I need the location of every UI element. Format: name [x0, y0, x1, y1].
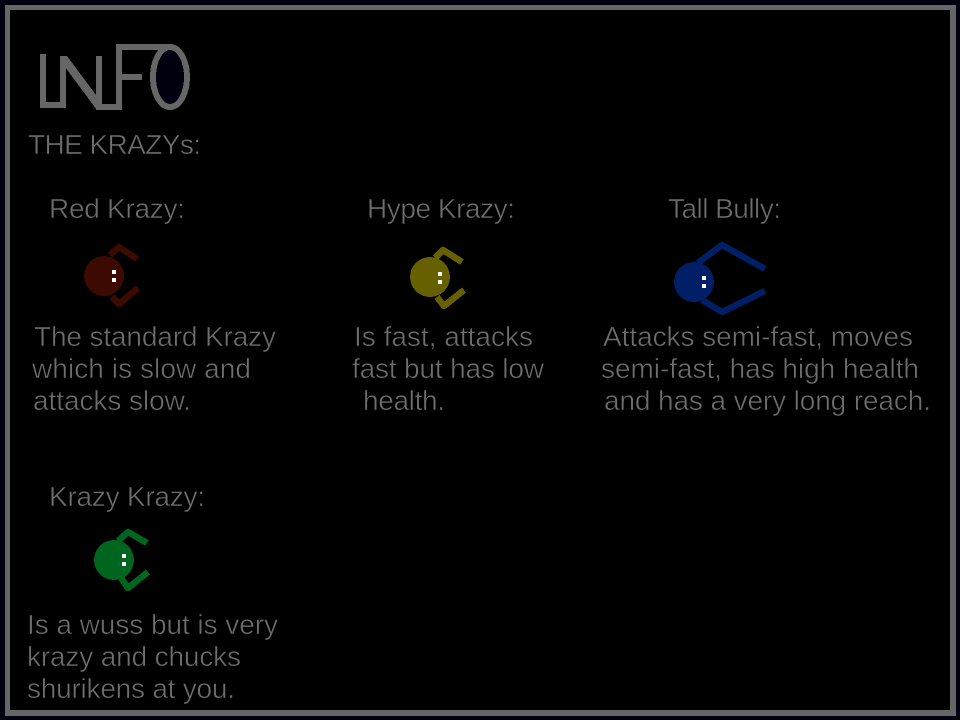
panel: Red Krazy: [31, 193, 276, 416]
panel: Krazy Krazy: [27, 481, 278, 704]
icon: hype krazy: [410, 250, 464, 306]
description: Hype Krazy: health.: [363, 385, 445, 416]
label: Krazy Krazy: Krazy Krazy:: [49, 481, 205, 512]
description: Red Krazy: attacks slow.: [33, 385, 191, 416]
panel: Tall Bully: [601, 193, 931, 416]
description: Tall Bully: Attacks semi-fast, moves: [603, 321, 913, 352]
icon: krazy krazy: [94, 532, 148, 588]
description: Krazy Krazy: Is a wuss but is very: [27, 609, 278, 640]
description: Hype Krazy: [352, 321, 545, 416]
icon: red krazy: [84, 247, 138, 304]
description: Red Krazy: The standard Krazy: [34, 321, 276, 352]
description: Tall Bully: and has a very long reach.: [604, 385, 931, 416]
label: Hype Krazy: Hype Krazy:: [367, 193, 515, 224]
description: Tall Bully: semi-fast, has high health: [601, 353, 919, 384]
description: Tall Bully: [601, 321, 931, 416]
description: Red Krazy: [31, 321, 276, 416]
description: Krazy Krazy: [27, 609, 278, 704]
description: Hype Krazy: Is fast, attacks: [354, 321, 533, 352]
description: Hype Krazy: fast but has low: [352, 353, 545, 384]
label: Tall Bully: Tall Bully:: [668, 193, 781, 224]
panel: Hype Krazy: [352, 193, 545, 416]
description: Krazy Krazy: shurikens at you.: [27, 673, 235, 704]
label: Red Krazy: Red Krazy:: [49, 193, 185, 224]
heading: THE KRAZYs: THE KRAZYs:: [28, 129, 201, 160]
description: Red Krazy: which is slow and: [31, 353, 251, 384]
icon: tall bully: [674, 245, 765, 312]
description: Krazy Krazy: krazy and chucks: [27, 641, 241, 672]
title: INFO: [40, 44, 187, 110]
